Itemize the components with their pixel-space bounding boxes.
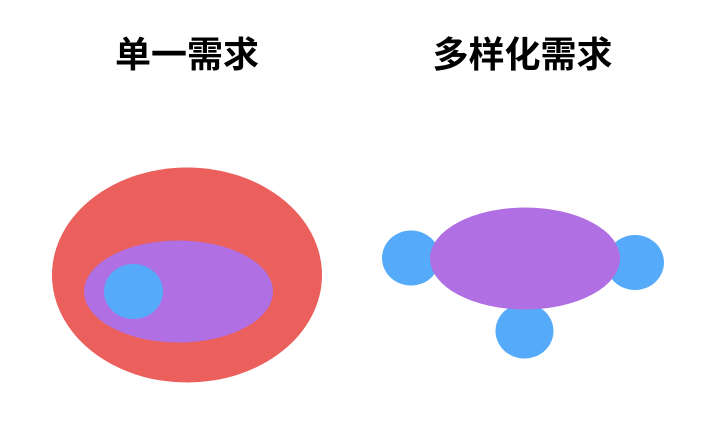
middle purple ellipse xyxy=(84,240,273,342)
central purple ellipse xyxy=(430,208,620,310)
outer red ellipse xyxy=(52,168,322,382)
bottom blue circle xyxy=(496,304,554,358)
left blue circle xyxy=(382,230,440,286)
right blue circle xyxy=(606,235,664,290)
diagram: single demand nested ellipses xyxy=(52,168,322,382)
inner blue circle xyxy=(104,264,163,319)
heading: single demand: 单一需求 xyxy=(115,34,259,75)
diagram: diversified demand xyxy=(382,208,664,358)
heading: diversified demand: 多样化需求 xyxy=(432,34,613,75)
